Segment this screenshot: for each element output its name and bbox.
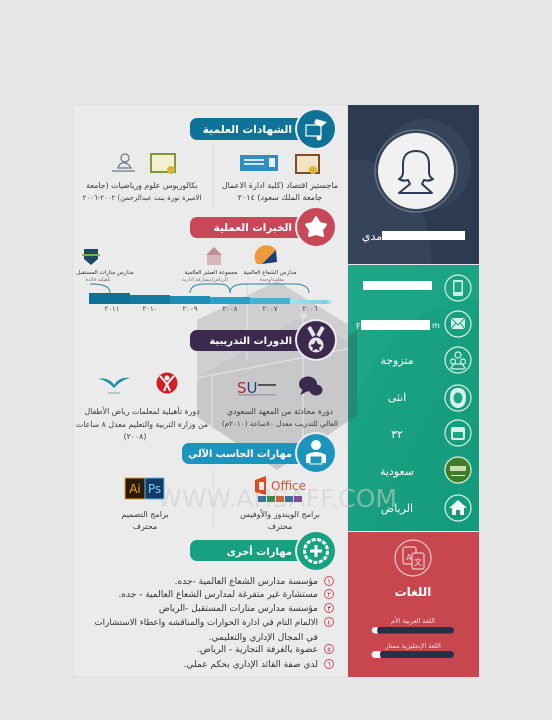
skill: design	[121, 478, 169, 531]
heading: certificates	[190, 108, 337, 150]
course: kindergarten: دورة تأهيلية لمعلمات رياض الأطفال	[84, 406, 200, 416]
job: future minarets schools	[76, 249, 134, 283]
logo: photoshop: Ps	[148, 482, 161, 496]
icon: speech bubbles	[299, 376, 322, 396]
watermark text: WWW.AHSAFF.COM	[157, 484, 397, 513]
timeline chart: ٢٠٠٦	[302, 305, 318, 313]
list: other skills: لدي صفة القائد الإداري بحكم عملي.	[184, 660, 318, 670]
course: conversation: العالي للتدريب معدل ٨٠ساعة (٢٠١٠م)	[222, 419, 338, 428]
skill: design: برامج التصميم	[121, 510, 169, 519]
timeline chart: ٢٠١١	[104, 305, 120, 313]
skill: office: برامج الويندوز والأوفيس	[240, 509, 320, 519]
timeline chart: ٢٠١٠	[142, 305, 158, 313]
age row	[391, 420, 471, 446]
course: kindergarten	[76, 372, 208, 441]
phone row	[363, 275, 471, 301]
email row: m	[432, 321, 440, 330]
list: other skills: الالمام التام في ادارة الحوارات والمناقشه واعطاء الاستشارات	[94, 618, 318, 628]
skill: office: محترف	[268, 522, 292, 531]
job: international rays schools	[244, 245, 297, 283]
job: future minarets schools: تأهيلية قائدة	[85, 275, 111, 283]
list: other skills: مؤسسة مدارس الشعاع العالمية -جده.	[175, 577, 318, 587]
watermark hexagon	[197, 281, 357, 470]
timeline chart: ٢٠٠٩	[182, 305, 198, 313]
icon: certificate	[150, 153, 176, 174]
email row: F	[356, 322, 361, 331]
list: other skills: ٢	[327, 590, 331, 598]
list: other skills: مؤسسة مدارس منارات المستقبل -الرياض	[159, 604, 318, 614]
heading: languages: اللغات	[395, 585, 431, 599]
heading: experience	[190, 206, 337, 248]
nationality row	[380, 457, 471, 483]
logo: university	[240, 155, 278, 171]
arabic bar	[372, 616, 454, 634]
course: conversation: دورة محادثة من المعهد السعودي	[227, 407, 333, 416]
arabic bar: اللغة العربية الأم	[391, 616, 435, 625]
panel: main sheet	[73, 105, 348, 677]
marital status row: متزوجة	[380, 354, 414, 367]
gender row	[388, 385, 471, 411]
list: other skills: ٦	[327, 660, 331, 668]
city row	[381, 495, 471, 521]
logo: ministry wings	[98, 378, 130, 394]
heading: experience: الخبرات العملية	[214, 222, 292, 234]
english bar: اللغة الإنجليزية ممتاز	[384, 642, 441, 650]
certificate: masters	[222, 154, 338, 202]
logo: university	[112, 154, 135, 172]
list: other skills: ٤	[327, 618, 331, 626]
list: other skills	[94, 576, 334, 670]
gender row: انثى	[388, 391, 406, 404]
panel: navy profile	[348, 105, 479, 264]
heading: courses: الدورات التدريبية	[209, 336, 292, 347]
certificate: bachelor	[83, 153, 201, 202]
icon: translate: 文	[414, 557, 422, 567]
name: مدي	[362, 230, 382, 243]
marital status row	[380, 347, 471, 373]
timeline chart	[89, 284, 332, 313]
list: other skills: مستشارة غير متفرغة لمدارس الشعاع العالمية - جده.	[118, 590, 318, 600]
logo: save the children	[156, 372, 178, 394]
list: other skills: ٥	[327, 646, 331, 654]
heading: other skills: مهارات أخرى	[227, 545, 292, 558]
job: international rays schools: مدارس الشعاع العالمية	[244, 270, 297, 276]
heading: other skills	[190, 530, 337, 572]
name	[362, 230, 465, 243]
list: other skills: في المجال الإداري والتعليمي.	[209, 633, 318, 643]
job: future minarets schools: مدارس منارات المستقبل	[76, 270, 134, 276]
certificate: bachelor: الاميرة نورة بنت عبدالرحمن) ٢٠٠٢-٢٠٠٦	[83, 194, 201, 202]
city row: الرياض	[381, 502, 413, 515]
logo: illustrator: Ai	[129, 482, 141, 496]
english bar	[372, 642, 454, 658]
certificate: masters: ماجستير اقتصاد (كلية ادارة الاعمال	[222, 181, 338, 190]
job: international rays schools: معلمة/وجدة	[260, 277, 285, 283]
job: knowledge group: الرياض/مشارفة ادارية	[182, 277, 228, 283]
certificates divider	[213, 143, 214, 209]
icon: certificate	[295, 154, 320, 174]
avatar	[375, 130, 457, 212]
email row	[356, 311, 471, 337]
skill: design: محترف	[133, 522, 157, 531]
heading: courses	[190, 319, 337, 361]
timeline chart: ٢٠٠٨	[222, 305, 238, 313]
heading: certificates: الشهادات العلمية	[203, 123, 292, 136]
logo: SU: SU	[237, 379, 258, 397]
timeline chart: ٢٠٠٧	[262, 305, 278, 313]
course: kindergarten: من وزارة التربية والتعليم معدل ٨ ساعات	[76, 420, 208, 429]
certificate: bachelor: بكالوريوس علوم ورياضيات (جامعة	[86, 181, 198, 190]
course: conversation	[222, 376, 338, 428]
course: kindergarten: (٢٠٠٨)	[124, 432, 146, 441]
panel: languages	[348, 532, 479, 677]
list: other skills: ١	[327, 578, 331, 586]
job: knowledge group: مجموعة العشر العالمية	[184, 270, 238, 276]
heading: computer skills: مهارات الحاسب الآلي	[188, 448, 292, 460]
icon: translate	[395, 540, 431, 576]
certificate: masters: جامعة الملك سعود) ٢٠١٤	[238, 193, 322, 202]
job: knowledge group	[182, 247, 238, 283]
list: other skills: ٣	[327, 604, 331, 612]
skill: office	[240, 476, 320, 531]
logo: office: Office	[271, 479, 306, 493]
computer divider	[213, 468, 214, 530]
list: other skills: عضوة بالغرفة التجارية - الرياض.	[197, 645, 318, 655]
nationality row: سعودية	[380, 465, 414, 478]
icon: translate: A	[406, 553, 412, 562]
panel: green contact	[348, 265, 479, 531]
age row: ٣٢	[391, 428, 403, 441]
heading: computer skills	[182, 432, 337, 474]
